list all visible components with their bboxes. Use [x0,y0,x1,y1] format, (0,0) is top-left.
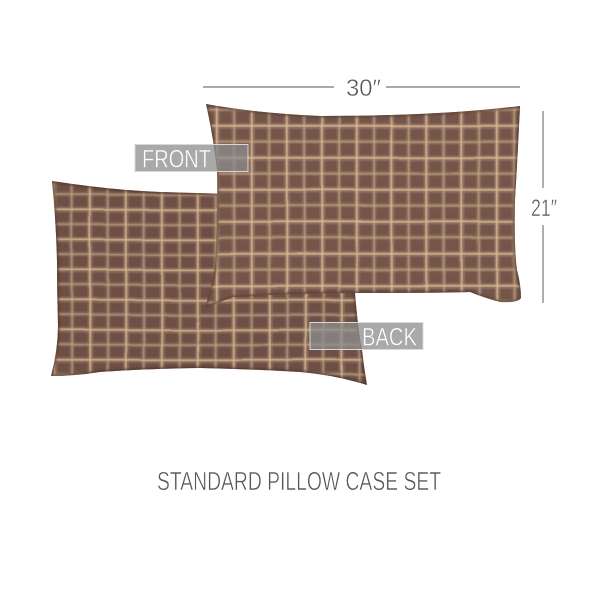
label: back: BACK [362,324,417,352]
height dimension: 21 inches: 21″ [531,195,557,222]
label: front: FRONT [142,146,211,174]
caption: STANDARD PILLOW CASE SET [157,466,441,496]
label: back [310,322,423,352]
width dimension: 30 inches: 30″ [346,75,381,102]
back pillow case [51,181,367,385]
front pillow case [200,100,525,315]
